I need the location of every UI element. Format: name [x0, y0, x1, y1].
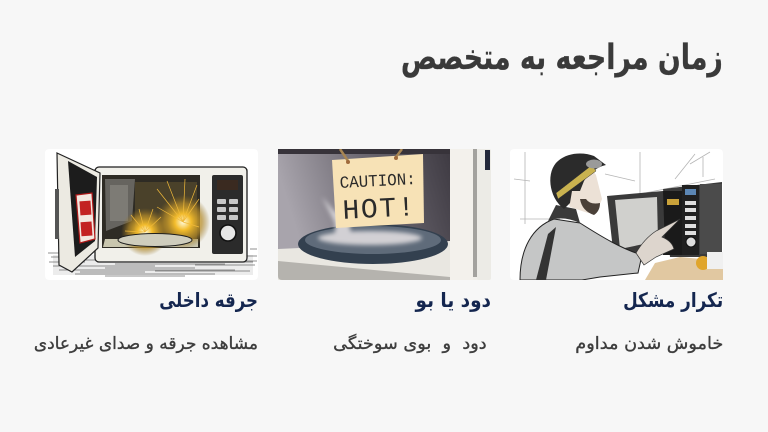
image: technician inspecting microwave [514, 152, 723, 280]
panel: recurring problem [514, 152, 723, 354]
panel: internal sparks [34, 152, 258, 354]
heading: دود یا بو [416, 288, 491, 312]
panel: smoke or smell [278, 149, 491, 354]
description: مشاهده جرقه و صدای غیرعادی [34, 334, 258, 354]
description: دود و بوی سوختگی [333, 334, 487, 354]
heading: تکرار مشکل [623, 288, 723, 312]
image: smoking plate with caution sign: HOT! [342, 193, 415, 228]
description: خاموش شدن مداوم [575, 334, 723, 354]
heading: جرقه داخلی [159, 288, 258, 312]
image: smoking plate with caution sign [278, 149, 491, 280]
image: smoking plate with caution sign: CAUTION: [339, 171, 416, 194]
title: زمان مراجعه به متخصص [401, 38, 723, 78]
image: open microwave with sparks [48, 152, 257, 276]
